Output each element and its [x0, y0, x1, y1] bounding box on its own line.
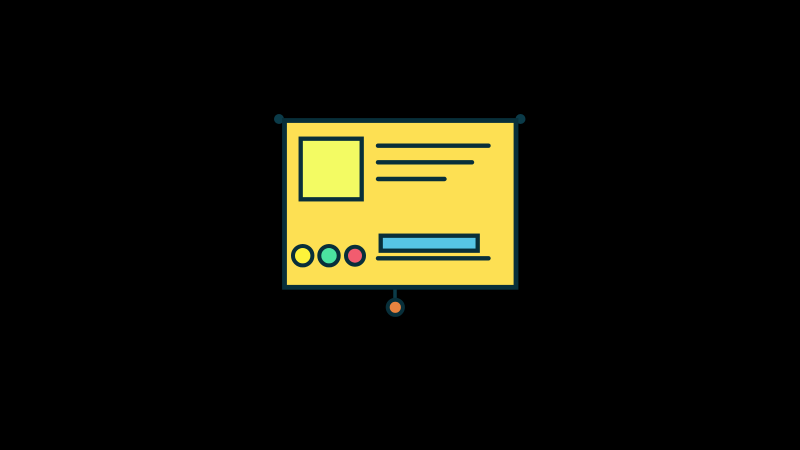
icon: green circle	[319, 246, 339, 265]
icon: red circle	[346, 247, 364, 265]
image placeholder square	[301, 139, 362, 199]
underline	[378, 256, 488, 260]
icon: pull cord and handle	[388, 288, 403, 315]
blue button bar	[381, 236, 478, 251]
icon: right hanging knob	[516, 114, 526, 124]
icon: yellow circle	[293, 246, 312, 265]
icon: presentation screen	[274, 114, 526, 315]
text lines block	[378, 146, 488, 179]
panel: yellow board	[284, 120, 516, 287]
icon: left hanging knob	[274, 114, 284, 124]
